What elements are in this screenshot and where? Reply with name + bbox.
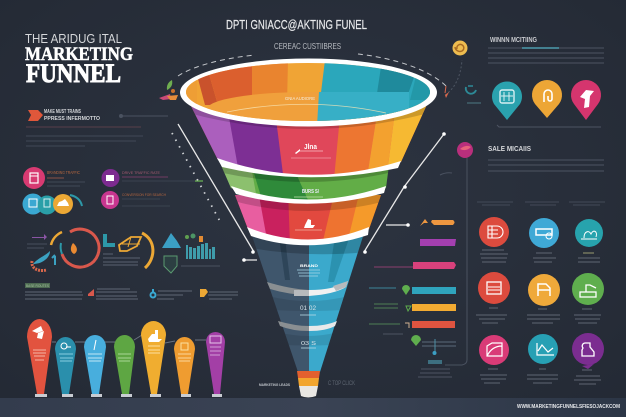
- note text: [157, 291, 192, 299]
- pill orange: [174, 337, 195, 397]
- pill yellow: [141, 321, 166, 397]
- funnel ring: under top band: [217, 158, 401, 177]
- icon: green pin and blue drop: [411, 335, 456, 355]
- icon: teal L shape and yellow lozenge: [105, 233, 153, 268]
- bar: red: [369, 321, 455, 328]
- pill blue: [84, 335, 106, 397]
- subheading: left arrow note: [26, 109, 168, 146]
- funnel label: top band: Jlna: [304, 144, 317, 151]
- panel: sale measures: [476, 144, 605, 384]
- text: purple badge note: [122, 170, 203, 181]
- funnel label: magenta band: [295, 219, 322, 230]
- icon tile red: [479, 217, 509, 262]
- icon: purple badge: [102, 169, 120, 187]
- pill green: [114, 335, 135, 397]
- icon tile pink: [479, 335, 509, 383]
- icon: blue key: [150, 289, 156, 298]
- connector: [52, 335, 206, 343]
- funnel ring 1: [267, 281, 348, 296]
- title: THE ARIDUG ITAL: [25, 31, 122, 46]
- chart: teal bar chart: [186, 243, 215, 259]
- text lines: [488, 53, 604, 63]
- label: BASE ROUTES: [26, 283, 49, 288]
- note text: [96, 289, 138, 299]
- title: MARKETING: [25, 44, 133, 65]
- chart: mountain: [162, 233, 181, 248]
- note text: [103, 254, 140, 265]
- icon: magenta badge: [101, 191, 119, 209]
- funnel interior label: GNIA AUDIORE: [285, 96, 315, 101]
- bar: orange: [420, 219, 454, 226]
- funnel segment: green band: [221, 165, 388, 200]
- icon: leaf cluster: [159, 80, 178, 100]
- note text: [27, 244, 47, 248]
- bar: pink: [374, 262, 456, 269]
- pill teal: [55, 337, 76, 397]
- pill red: [27, 319, 52, 397]
- left icon list: [22, 167, 203, 214]
- label: bottom of funnel right: C TOP CLICK: [328, 381, 355, 387]
- title: [25, 31, 133, 88]
- funnel label: lower tiers: 03 S: [301, 341, 317, 347]
- left diagrams row: [27, 229, 220, 273]
- icon: blue teal yellow badges: [22, 194, 82, 214]
- bar: teal: [369, 285, 456, 295]
- subheading: left arrow note: MAKE MUST TRAINS: [44, 109, 81, 115]
- funnel label: lower tiers: [297, 263, 320, 348]
- heading: funnel subtitle: CEREAC CUSTIIBRES: [274, 41, 341, 51]
- panel: top right: [488, 35, 604, 127]
- chart: circular cycle: [32, 229, 99, 271]
- floor band: [0, 398, 626, 417]
- icon tile green: [572, 273, 604, 323]
- icon: small markers: [185, 234, 203, 242]
- bar labels list: [369, 219, 456, 377]
- icon: orange tag: [200, 289, 208, 297]
- icon: arrow: [32, 234, 47, 240]
- funnel tip: [297, 371, 320, 398]
- title: FUNNEL: [26, 59, 121, 88]
- icon: red tag: [88, 289, 94, 296]
- bracket line: [440, 173, 467, 365]
- funnel segment: blue cone: [252, 236, 363, 372]
- pin yellow: [532, 80, 562, 118]
- funnel label: lower tiers: BRAND: [300, 263, 318, 268]
- funnel label: top band: [291, 144, 331, 158]
- heading: funnel title: DPTI GNIACC@AKTING FUNEL: [226, 17, 367, 32]
- icon: magenta orb: [457, 142, 473, 190]
- funnel interior: [186, 63, 430, 121]
- icon tile teal 2: [527, 334, 558, 383]
- note: [383, 333, 403, 335]
- dashed arcs and connector lines: [172, 54, 462, 262]
- funnel ring 2: [278, 321, 337, 331]
- icon: orange marker: [445, 92, 449, 98]
- funnel label: green band: BURS S/: [302, 189, 320, 195]
- icon tile red 2: [476, 272, 510, 323]
- icon tile teal: [575, 219, 603, 262]
- icon tile yellow: [527, 274, 560, 323]
- text: magenta badge note: [122, 192, 170, 206]
- funnel label: lower tiers: 01 02: [300, 306, 317, 312]
- funnel interior floor: [207, 92, 409, 121]
- icon: pink badge: [23, 167, 45, 189]
- text: magenta badge note: CONVERSION FOR SEARCH: [122, 192, 166, 197]
- pin teal: [492, 82, 522, 120]
- funnel label: green band: [294, 189, 323, 197]
- note text: [208, 292, 238, 299]
- pin pink: [571, 80, 601, 120]
- icon: swirl coin: [452, 40, 468, 56]
- text lines: [488, 160, 604, 171]
- text: purple badge note: DRIVE TRAFFIC RATE: [122, 170, 160, 175]
- funnel rim: [180, 58, 437, 126]
- funnel ring: under green band: [231, 186, 386, 204]
- funnel ring: under magenta band: [247, 227, 369, 245]
- note text: [25, 292, 83, 299]
- icon: teal refresh: [466, 86, 481, 103]
- heading: SALE MICAIIS: [488, 144, 531, 153]
- bottom pill bars: [27, 319, 225, 397]
- heading: WINNN MCITIING: [490, 35, 537, 44]
- text: pink badge note: BRANDING TRAFFIC: [47, 170, 81, 175]
- icon tile purple: [572, 333, 604, 384]
- note: [418, 360, 452, 377]
- text: pink badge note: [47, 170, 85, 186]
- bar: yellow: [374, 304, 456, 311]
- funnel segment: magenta band: [235, 195, 381, 240]
- funnel: [180, 55, 440, 398]
- icon tile blue: [529, 218, 559, 262]
- subheading: left arrow note: PPRESS INFERMOTTO: [44, 116, 100, 122]
- label: bottom of funnel left: MARKETING LEADS: [259, 382, 290, 387]
- pill purple: [206, 332, 225, 397]
- lower left notes: [25, 283, 238, 299]
- bar: purple: [420, 239, 456, 246]
- funnel segment: top rainbow band: [191, 106, 426, 175]
- icon: shield: [164, 256, 177, 273]
